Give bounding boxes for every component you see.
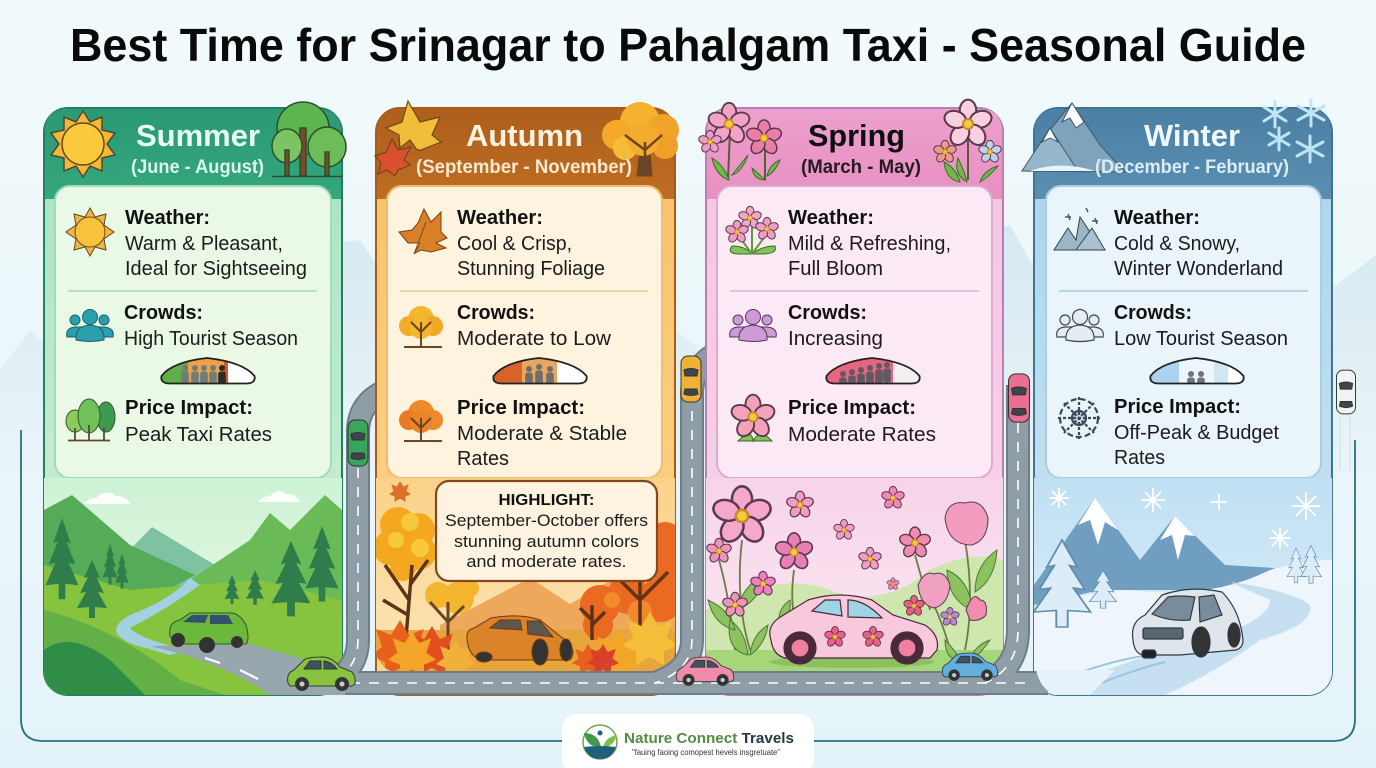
spring header band — [707, 109, 1002, 199]
faint road to the right — [1340, 415, 1350, 470]
panel: spring — [698, 100, 1003, 695]
icon: header sun — [51, 111, 115, 177]
winter heading: Winter — [1144, 118, 1240, 153]
car: green top view — [348, 420, 368, 466]
panel: winter — [1022, 100, 1332, 695]
icon: logo emblem — [583, 725, 617, 759]
car: green small — [288, 657, 355, 690]
weather text — [457, 207, 605, 280]
snow over road end — [1036, 670, 1115, 695]
spring info card — [717, 186, 992, 478]
crowds text: Crowds: — [124, 302, 203, 324]
icon: header flowers right — [933, 100, 1002, 182]
crowds text: Low Tourist Season — [1114, 328, 1288, 350]
icon: weather mountains — [1054, 208, 1105, 250]
price text: Peak Taxi Rates — [125, 424, 272, 446]
icon: weather sun — [66, 208, 114, 256]
price text: Price Impact: — [457, 397, 585, 419]
autumn scene car — [467, 616, 573, 665]
winter months: (December - February) — [1095, 157, 1289, 178]
weather text: Stunning Foliage — [457, 258, 605, 280]
crowd gauge — [492, 356, 587, 386]
winter panel base — [1034, 108, 1332, 695]
autumn heading: Autumn — [466, 118, 583, 153]
winter header band — [1035, 109, 1331, 199]
panel: summer — [44, 102, 346, 695]
callout: highlight — [436, 481, 657, 581]
price text: Off-Peak & Budget — [1114, 422, 1279, 444]
logo name: Nature Connect Travels — [624, 731, 794, 747]
icon: price tree — [399, 400, 443, 441]
crowd gauge — [1149, 357, 1245, 384]
spring heading: Spring — [808, 118, 905, 153]
spring months: (March - May) — [801, 157, 921, 178]
price text — [125, 397, 272, 446]
price text: Moderate & Stable — [457, 423, 627, 445]
icon: header autumn tree — [602, 102, 679, 176]
weather text: Ideal for Sightseeing — [125, 258, 307, 280]
weather text: Weather: — [1114, 207, 1200, 229]
winter snow scene — [1034, 478, 1332, 695]
logo tagline: "fauing faoing comopest hevels insgretuate" — [632, 748, 780, 757]
road bends behind panels — [358, 344, 740, 432]
summer months: (June - August) — [131, 157, 264, 178]
summer header band — [45, 109, 341, 199]
panel: autumn — [370, 101, 688, 698]
weather text: Weather: — [788, 207, 874, 229]
summer heading: Summer — [136, 118, 260, 153]
weather text: Full Bloom — [788, 258, 883, 280]
autumn header band — [377, 109, 674, 199]
crowds text: Moderate to Low — [457, 328, 612, 350]
summer valley scene — [44, 478, 342, 695]
crowds text: Crowds: — [457, 302, 535, 324]
icon: weather leaf — [399, 209, 447, 254]
icon: crowds tree — [399, 306, 443, 347]
weather text: Weather: — [125, 207, 210, 229]
icon: tulips — [918, 502, 988, 620]
icon: header flowers left — [698, 103, 783, 180]
price text: Price Impact: — [1114, 396, 1241, 418]
autumn info card — [387, 186, 662, 478]
icon: header mountains — [1022, 103, 1125, 172]
callout: highlight: stunning autumn colors — [454, 532, 639, 551]
crowds text: Crowds: — [1114, 302, 1192, 324]
icon: header snowflakes — [1264, 100, 1324, 162]
icon: weather flowers — [725, 206, 779, 254]
winter info card — [1046, 186, 1321, 478]
autumn months: (September - November) — [416, 157, 632, 178]
crowd gauge — [825, 357, 921, 384]
callout: highlight: September-October offers — [445, 511, 648, 530]
weather text: Mild & Refreshing, — [788, 233, 951, 255]
weather text: Cold & Snowy, — [1114, 233, 1240, 255]
spring garden scene — [706, 478, 1003, 680]
autumn panel base — [376, 108, 675, 695]
weather text — [1114, 207, 1283, 280]
car: silver snow car — [1132, 589, 1243, 658]
crowd gauge — [160, 356, 255, 386]
icon: crowd — [67, 310, 113, 342]
route frame outline — [21, 430, 1355, 741]
logo badge — [562, 714, 814, 768]
car: pink top view — [1008, 374, 1030, 422]
summer road into valley — [150, 644, 345, 695]
crowds text: Increasing — [788, 328, 883, 350]
callout: highlight: HIGHLIGHT: — [498, 492, 594, 509]
price text: Rates — [1114, 447, 1165, 469]
crowds text — [1114, 302, 1288, 350]
car: pink small — [676, 657, 734, 685]
crowds text: Crowds: — [788, 302, 867, 324]
car: blue small — [942, 653, 998, 680]
winding road — [290, 385, 1048, 683]
car: yellow top view — [681, 356, 701, 402]
icon: crowd — [1057, 310, 1103, 342]
price text: Rates — [457, 448, 509, 470]
crowds text — [788, 302, 883, 350]
background mountains — [0, 225, 1376, 480]
weather text: Winter Wonderland — [1114, 258, 1283, 280]
summer info card — [55, 186, 331, 478]
icon: price snowflake — [1058, 397, 1100, 439]
weather text: Warm & Pleasant, — [125, 233, 283, 255]
crowds text: High Tourist Season — [124, 328, 298, 350]
icon: crowd — [730, 310, 776, 342]
title: Best Time for Srinagar to Pahalgam Taxi - Seasonal Guide — [70, 19, 1306, 71]
price text: Price Impact: — [788, 397, 916, 419]
icon: header trees — [272, 102, 346, 176]
crowds text — [124, 302, 298, 350]
price text — [1114, 396, 1279, 469]
autumn forest scene — [376, 478, 675, 671]
icon: price blossom — [730, 395, 776, 441]
car: white top view — [1336, 370, 1356, 414]
weather text — [125, 207, 307, 280]
icon: header leaves — [375, 101, 441, 176]
price text — [788, 397, 936, 446]
summer panel base — [44, 108, 342, 695]
spring scene car — [770, 595, 938, 668]
weather text — [788, 207, 951, 280]
summer scene car — [170, 613, 248, 653]
weather text: Weather: — [457, 207, 543, 229]
icon: price trees — [66, 399, 115, 440]
spring panel base — [706, 108, 1003, 695]
price text: Price Impact: — [125, 397, 253, 419]
weather text: Cool & Crisp, — [457, 233, 572, 255]
price text: Moderate Rates — [788, 424, 936, 446]
callout: highlight: and moderate rates. — [466, 552, 626, 571]
price text — [457, 397, 627, 470]
crowds text — [457, 302, 612, 350]
